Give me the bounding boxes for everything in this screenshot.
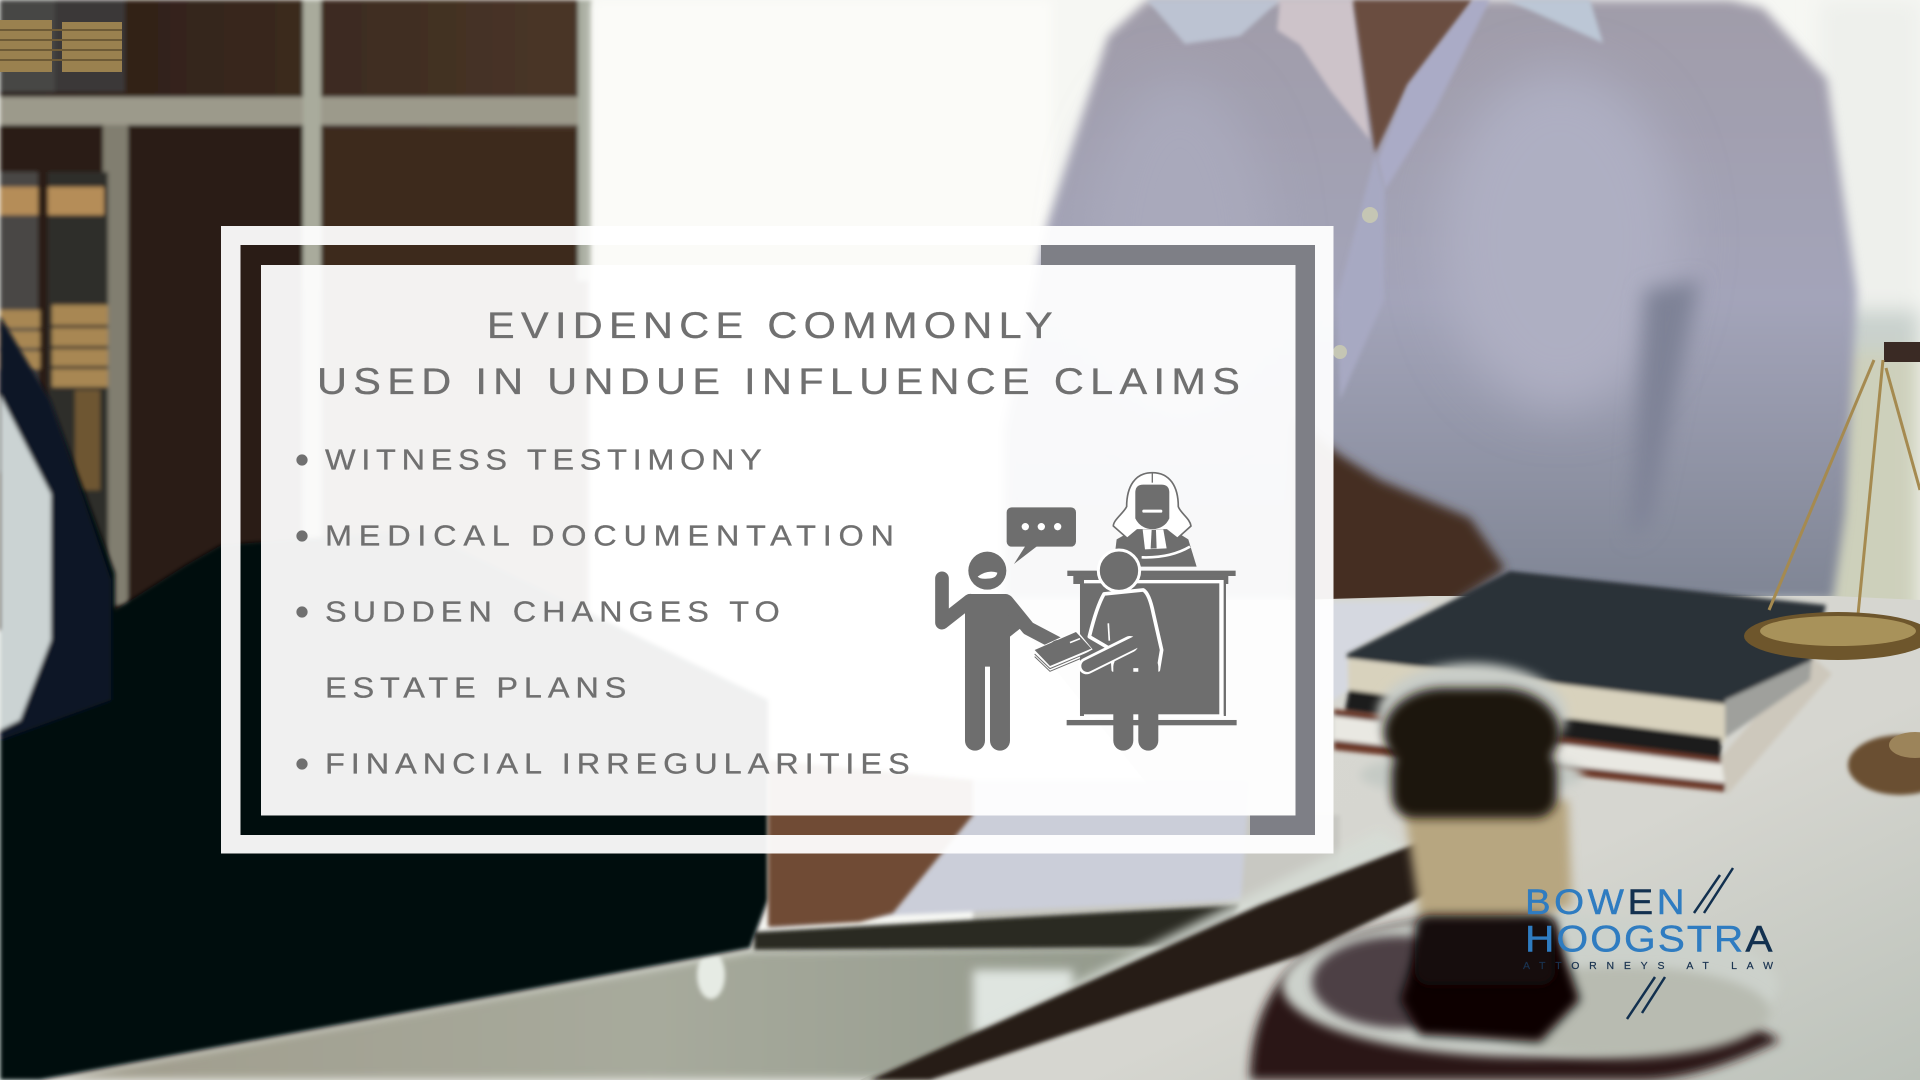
icon: bribing a judge with cash [942,473,1237,751]
background: bookshelf [0,0,592,630]
logo slashes bottom [1627,977,1665,1019]
panel: grey shirt band inside frame [1041,245,1315,835]
list item: medical documentation: MEDICAL DOCUMENTATION [325,519,894,552]
title: USED IN UNDUE INFLUENCE CLAIMS [317,361,1240,402]
background: hands [1296,419,1505,620]
logo: Bowen Hoogstra Attorneys at Law [1523,868,1773,1019]
gavel base left surface [1312,936,1488,1028]
list item: financial irregularities: FINANCIAL IRREGULARITIES [325,747,910,780]
panel: inner translucent content card [261,265,1296,816]
gavel base top rim [1282,913,1778,1057]
background: table [860,596,1920,1080]
shirt button strip [1337,155,1385,400]
logo tagline: ATTORNEYS AT LAW [1523,960,1773,972]
logo slashes top [1694,868,1733,913]
shirt open neck [1353,0,1473,153]
panel: outer translucent frame [221,226,1334,854]
background: gold bands on upper books [0,20,122,72]
title: EVIDENCE COMMONLY [487,305,1053,346]
gavel head [1384,688,1560,818]
icon part: stack of money [1033,630,1093,673]
icon part: speech bubble [1007,507,1076,564]
gavel lower body shadow [1400,920,1580,1042]
logo wordmark second line: HOOGSTRA [1525,919,1773,960]
icon part: judge podium [1067,571,1237,725]
shirt collar left [1147,0,1280,44]
background: leather books [1334,571,1832,795]
background: white reflection [697,951,725,999]
list item: sudden changes to estate plans: ESTATE PLANS [325,671,626,704]
bullet list of evidence types [296,443,910,780]
background: paper near books [1300,602,1434,720]
title [317,305,1240,402]
background: document shadow edge [754,905,1240,950]
shirt dark fold [1630,280,1700,540]
list item: sudden changes to estate plans: SUDDEN CHANGES TO [325,595,780,628]
background: gavel [870,663,1780,1080]
background: dark suit and arm [0,316,768,1080]
background: shirt [1004,0,1857,600]
icon part: judge with wig [1113,473,1197,567]
shirt buttons [1333,207,1378,359]
background: reflection on table [973,970,1073,1033]
gavel lower ring [1415,915,1555,985]
background: paper under panel [768,780,1250,928]
gavel base body [1250,917,1780,1080]
list item: sudden changes to estate plans [296,595,780,704]
shirt placket left [1277,0,1370,140]
icon part: right person receiving [1087,550,1162,751]
gavel side highlights [1360,753,1584,797]
background: table mid tone [973,815,1340,940]
background: scale of justice [1744,342,1920,795]
gavel handle highlight [980,830,1410,1040]
shirt soft lighter zones [1090,70,1680,420]
background: window right of shirt [1820,0,1920,640]
gavel band [1403,800,1572,924]
background: table foreground [40,940,1260,1080]
icon part: left person speaking [942,552,1060,751]
shirt placket right [1378,0,1490,190]
gavel handle [870,838,1440,1080]
background: blurred window glare [592,0,1052,640]
list item: witness testimony: WITNESS TESTIMONY [325,443,762,476]
gavel base right surface [1470,966,1770,1058]
background: forearm skin [768,760,973,927]
shirt collar right [1507,0,1603,43]
gavel head halo [1377,663,1567,767]
logo wordmark first line: BOWEN [1525,883,1685,922]
